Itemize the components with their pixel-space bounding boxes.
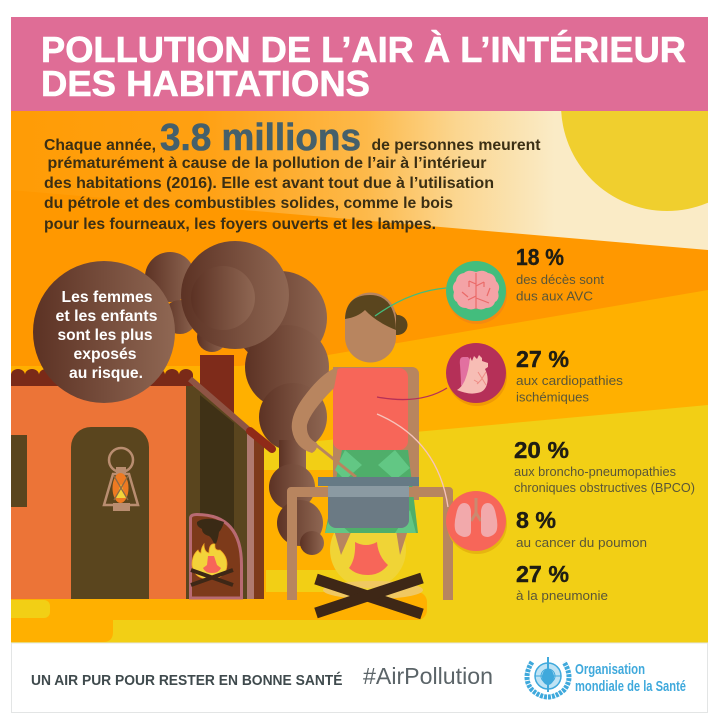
legs [334, 530, 408, 555]
icon: heart [446, 343, 507, 406]
window [11, 435, 27, 507]
firewood [316, 578, 422, 614]
skirt [325, 450, 418, 533]
statistic: heart disease: ischémiques [516, 390, 589, 404]
speech bubble: Les femmes [62, 289, 152, 306]
hair [345, 295, 396, 330]
footer [12, 643, 708, 712]
intro text: pour les fourneaux, les foyers ouverts et les lampes. [44, 216, 436, 233]
intro text: du pétrole et des combustibles solides, comme le bois [44, 195, 453, 212]
intro text: 3.8 millions [160, 117, 361, 159]
statistic: COPD: chroniques obstructives (BPCO) [514, 480, 695, 495]
head [345, 292, 396, 362]
statistic: lung cancer [516, 507, 647, 550]
fireplace [190, 514, 242, 598]
slogan: UN AIR PUR POUR RESTER EN BONNE SANTÉ [31, 672, 343, 689]
intro text [44, 117, 541, 233]
WHO name: mondiale de la Santé [575, 678, 686, 695]
statistic: lung cancer: 8 % [516, 507, 556, 533]
statistic: stroke [516, 244, 604, 304]
title banner: DES HABITATIONS [41, 63, 370, 104]
statistic: stroke: dus aux AVC [516, 288, 593, 304]
hashtag: #AirPollution [363, 663, 493, 689]
WHO name [575, 661, 686, 695]
background scene [11, 111, 708, 642]
arm and stirring stick [292, 367, 356, 477]
statistic: heart disease: aux cardiopathies [516, 373, 624, 388]
hair bun [378, 297, 408, 335]
door [71, 427, 149, 599]
statistic: heart disease: 27 % [516, 346, 569, 372]
icon: brain [446, 261, 507, 324]
statistic: COPD: aux broncho-pneumopathies [514, 464, 676, 479]
house [11, 355, 272, 599]
connector lines [375, 288, 448, 507]
icon: WHO emblem [527, 657, 569, 697]
roof scallops [11, 369, 193, 388]
intro text: Chaque année, [44, 137, 156, 154]
icon: lungs [446, 491, 507, 554]
WHO name: Organisation [575, 661, 645, 678]
icon: oil lamp [104, 448, 138, 511]
statistic: stroke: 18 % [516, 244, 564, 270]
speech bubble: exposés [74, 346, 136, 363]
torso [333, 368, 408, 450]
title banner: POLLUTION DE L’AIR À L’INTÉRIEUR [41, 29, 686, 70]
speech bubble: et les enfants [56, 308, 158, 325]
statistic: stroke: des décès sont [516, 272, 604, 287]
intro text: des habitations (2016). Elle est avant tout due à l’utilisation [44, 175, 494, 192]
statistic: pneumonia [516, 561, 608, 603]
statistic: lung cancer: au cancer du poumon [516, 535, 647, 550]
speech bubble [33, 261, 175, 403]
roof edge [190, 379, 272, 449]
fire [323, 512, 423, 599]
speech bubble: sont les plus [58, 327, 152, 344]
statistic: COPD: 20 % [514, 437, 569, 463]
speech bubble: au risque. [69, 365, 143, 382]
statistic: pneumonia: 27 % [516, 561, 569, 587]
intro text: de personnes meurent [372, 137, 541, 154]
smoke plume [145, 241, 329, 555]
woman cooking [287, 292, 453, 614]
title banner [11, 17, 708, 111]
house front wall [11, 386, 186, 599]
statistic: heart disease [516, 346, 624, 404]
cooking pot [318, 477, 419, 528]
house side wall [186, 380, 264, 599]
chimney [200, 355, 234, 425]
table [287, 487, 453, 600]
intro text: prématurément à cause de la pollution de l’air à l’intérieur [48, 155, 486, 172]
statistic: pneumonia: à la pneumonie [516, 588, 608, 603]
chair back [333, 367, 419, 500]
statistic: COPD [514, 437, 695, 495]
